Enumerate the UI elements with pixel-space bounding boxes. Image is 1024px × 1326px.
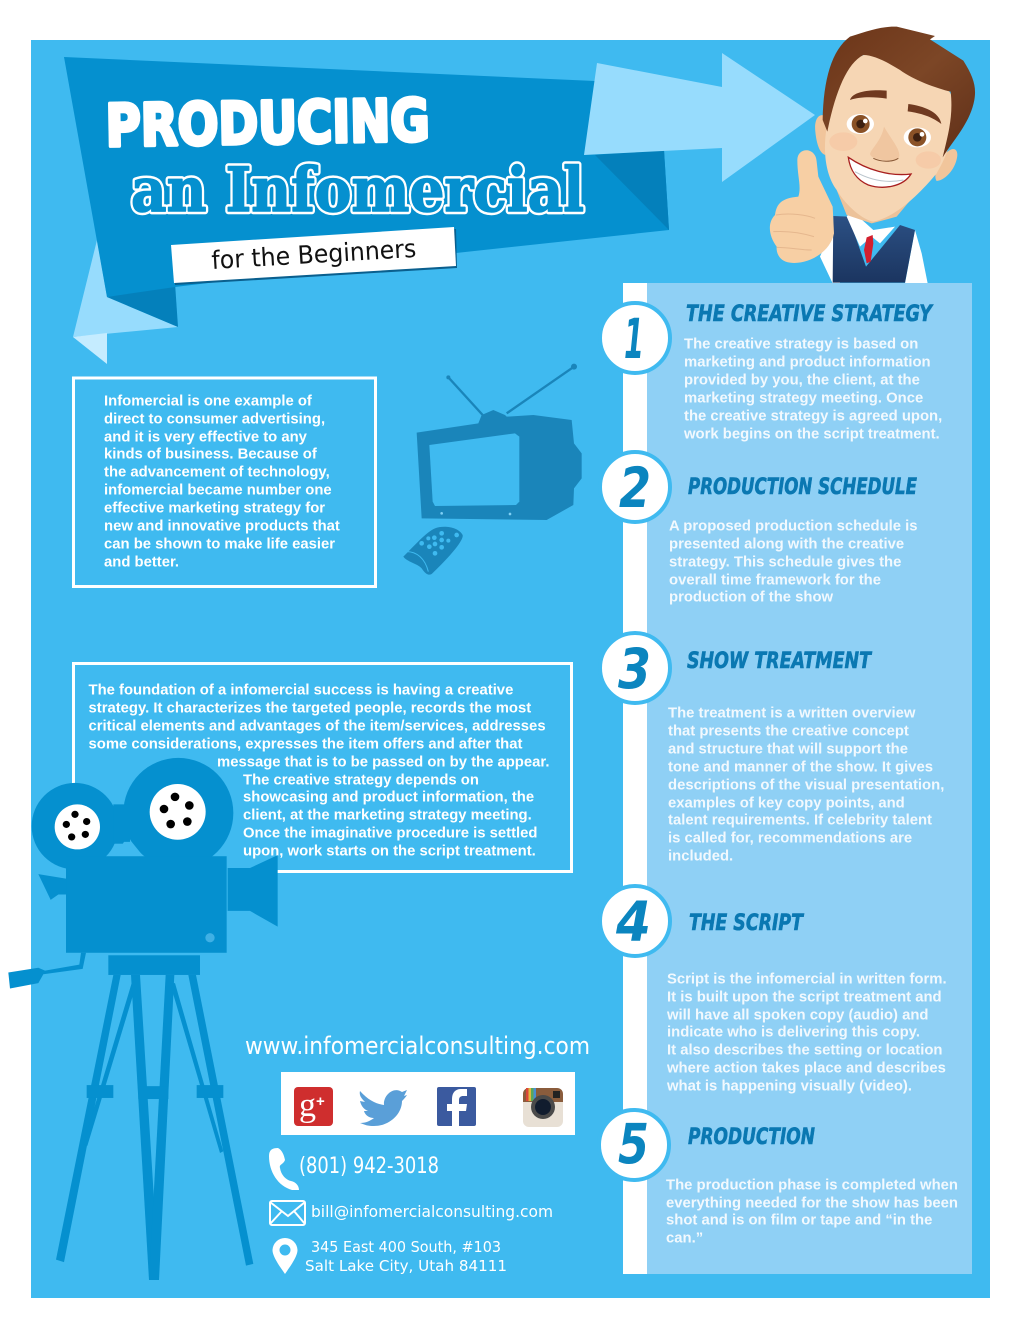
icon: film camera on tripod <box>8 758 278 1280</box>
step 4 <box>600 886 947 1094</box>
step 2: overall time framework for the <box>669 572 881 588</box>
intro text box: and better. <box>104 554 179 570</box>
subtitle ribbon: for the Beginners <box>211 234 417 275</box>
step 1: the creative strategy is agreed upon, <box>684 408 942 424</box>
intro text box: kinds of business. Because of <box>104 446 317 462</box>
step 3: tone and manner of the show. It gives <box>668 760 933 776</box>
step 5: The production phase is completed when <box>666 1178 958 1194</box>
step 1: provided by you, the client, at the <box>684 372 920 388</box>
step 5: everything needed for the show has been <box>666 1196 958 1212</box>
icon: instagram camera <box>523 1088 563 1127</box>
icon: location pin <box>272 1238 298 1274</box>
intro text box: effective marketing strategy for <box>104 500 325 516</box>
icon: television and remote <box>403 364 582 575</box>
intro text box <box>74 378 376 586</box>
foundation text box: message that is to be passed on by the appear. <box>217 754 549 770</box>
step 4: will have all spoken copy (audio) and <box>666 1008 928 1024</box>
step 2: PRODUCTION SCHEDULE <box>688 475 917 500</box>
intro text box: the advancement of technology, <box>104 464 330 480</box>
step 2: production of the show <box>669 590 834 606</box>
step 3: examples of key copy points, and <box>668 796 905 812</box>
step 4: Script is the infomercial in written form. <box>667 972 947 988</box>
foundation text box <box>74 664 572 872</box>
character: thumbs-up businessman <box>770 27 975 283</box>
step 1 <box>600 302 942 442</box>
step 2: strategy. This schedule gives the <box>669 554 901 570</box>
street address: 345 East 400 South, #103 <box>311 1238 501 1256</box>
title: an Infomercial: an Infomercial <box>131 155 584 226</box>
foundation text box: showcasing and product information, the <box>243 790 534 806</box>
step 1: work begins on the script treatment. <box>683 426 940 442</box>
title banner <box>64 53 815 364</box>
icon: google plus: + <box>316 1093 325 1110</box>
step 1: THE CREATIVE STRATEGY <box>686 302 934 327</box>
foundation text box: critical elements and advantages of the item/services, addresses <box>88 718 546 734</box>
email address: bill@infomercialconsulting.com <box>311 1202 553 1221</box>
step 3: descriptions of the visual presentation, <box>668 778 944 794</box>
step 4: indicate who is delivering this copy. <box>667 1024 920 1040</box>
step 5: 5 <box>618 1112 649 1176</box>
icon: phone <box>269 1148 299 1190</box>
step 4: THE SCRIPT <box>689 911 805 936</box>
step 3: that presents the creative concept <box>668 724 909 740</box>
step 4: It is built upon the script treatment and <box>667 990 942 1006</box>
intro text box: direct to consumer advertising, <box>104 412 325 428</box>
intro text box: can be shown to make life easier <box>104 536 335 552</box>
step 3: SHOW TREATMENT <box>687 649 873 674</box>
step 3 <box>600 633 944 864</box>
foundation text box: The foundation of a infomercial success is having a creative <box>88 682 513 698</box>
street address <box>305 1238 507 1275</box>
step 2: A proposed production schedule is <box>669 518 918 534</box>
intro text box: infomercial became number one <box>104 482 332 498</box>
subtitle ribbon <box>171 227 457 285</box>
step 3: The treatment is a written overview <box>668 706 916 722</box>
step 4: 4 <box>615 890 651 954</box>
foundation text box: The creative strategy depends on <box>243 772 479 788</box>
title: Producing: PRODUCING <box>105 86 430 160</box>
icon: twitter bird <box>360 1090 407 1126</box>
step 3: and structure that will support the <box>668 742 908 758</box>
icon: google plus: g <box>299 1087 316 1124</box>
icon: google plus <box>294 1087 333 1126</box>
step 3: 3 <box>618 637 651 701</box>
icon: envelope <box>270 1201 305 1225</box>
foundation text box: upon, work starts on the script treatment. <box>243 844 536 860</box>
phone number: (801) 942-3018 <box>299 1154 439 1179</box>
foundation text box: client, at the marketing strategy meeting. <box>243 808 532 824</box>
foundation text box: Once the imaginative procedure is settled <box>243 826 538 842</box>
foundation text box: some considerations, expresses the item offers and after that <box>88 736 522 752</box>
street address: Salt Lake City, Utah 84111 <box>305 1257 507 1275</box>
step 4: where action takes place and describes <box>666 1060 946 1076</box>
foundation text box: strategy. It characterizes the targeted people, records the most <box>88 700 531 716</box>
step 2: presented along with the creative <box>669 536 904 552</box>
step 5: PRODUCTION <box>688 1125 815 1150</box>
step 4: It also describes the setting or location <box>667 1042 942 1058</box>
step 4: what is happening visually (video). <box>666 1078 912 1094</box>
intro text box: Infomercial is one example of <box>104 394 312 410</box>
intro text box: new and innovative products that <box>104 518 340 534</box>
website url: www.infomercialconsulting.com <box>245 1032 590 1060</box>
step 2 <box>600 452 918 606</box>
step 5: can.” <box>666 1230 703 1246</box>
steps column <box>623 283 972 1274</box>
step 3: is called for, recommendations are <box>668 830 912 846</box>
intro text box: and it is very effective to any <box>104 430 308 446</box>
icon: facebook <box>437 1087 476 1126</box>
step 1: marketing and product information <box>684 354 931 370</box>
step 1: The creative strategy is based on <box>684 336 918 352</box>
title: an Infomercial: an Infomercial <box>131 155 584 226</box>
step 5 <box>599 1110 958 1246</box>
step 1: 1 <box>624 307 644 371</box>
step 3: talent requirements. If celebrity talent <box>668 812 932 828</box>
step 3: included. <box>668 848 733 864</box>
step 5: shot and is on film or tape and “in the <box>666 1212 932 1228</box>
social media bar <box>281 1072 575 1135</box>
step 1: marketing strategy meeting. Once <box>684 390 923 406</box>
step 2: 2 <box>619 456 651 520</box>
